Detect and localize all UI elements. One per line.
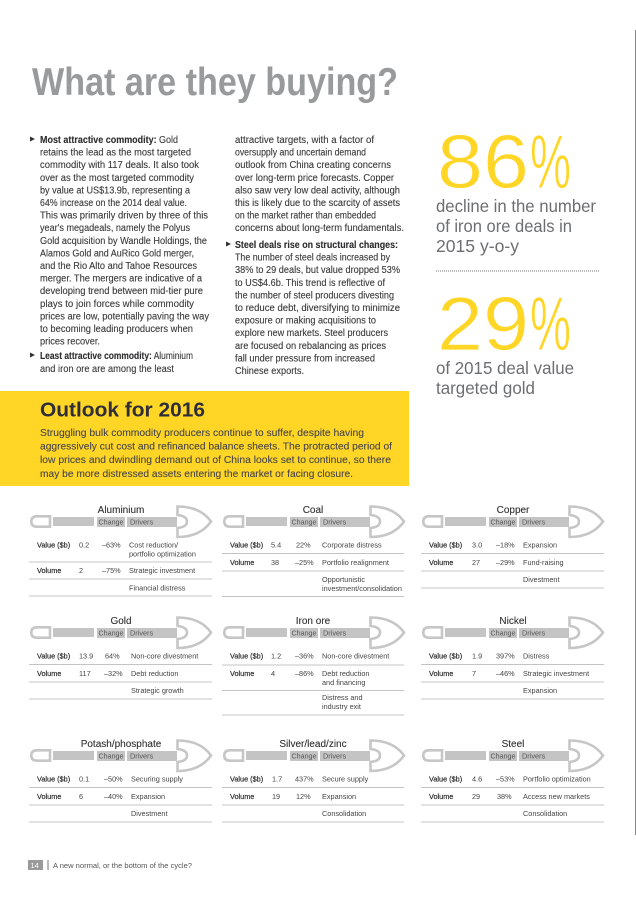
text block: left column: and iron ore are among the least xyxy=(40,364,174,375)
icon: shovel xyxy=(224,618,404,648)
text block: left column: by value at US$13.9b, representing a xyxy=(40,185,190,196)
table: gold data xyxy=(29,652,212,699)
table header xyxy=(98,518,153,526)
table: iron ore data: –86% xyxy=(295,669,314,678)
table: silver data: 437% xyxy=(295,774,314,784)
heading: gold: Gold xyxy=(110,616,132,627)
table: aluminium data: 0.2 xyxy=(79,540,89,550)
text block: left column: to becoming leading producers when xyxy=(40,324,193,335)
panel: copper xyxy=(421,505,604,588)
table: iron ore data: Non-core divestment xyxy=(322,652,389,660)
table: steel data xyxy=(421,774,604,822)
text block: left column: and the Rio Alto and Tahoe Resources xyxy=(40,261,197,272)
table: aluminium data: Strategic investment xyxy=(129,566,195,575)
table: coal data: Portfolio realignment xyxy=(322,558,389,567)
table: potash data xyxy=(29,774,212,822)
text block: left column: prices recover. xyxy=(40,337,100,348)
table header: Change xyxy=(292,752,316,760)
table: steel data: Portfolio optimization xyxy=(523,774,591,784)
footer: A new normal, or the bottom of the cycle? xyxy=(53,861,192,870)
table: nickel data: Value ($b) xyxy=(429,652,462,660)
text block: middle column: the number of steel producers divesting xyxy=(235,290,394,301)
icon: shovel xyxy=(423,740,603,771)
text block: left column: Alamos Gold and AuRico Gold merger, xyxy=(40,248,194,259)
table: steel data: 38% xyxy=(497,792,512,801)
text block: middle column: Steel deals rise on structural changes: xyxy=(235,240,398,251)
table header: Drivers xyxy=(522,752,545,760)
panel: steel xyxy=(421,739,604,822)
icon: shovel xyxy=(423,506,603,537)
table: steel data: Consolidation xyxy=(523,809,567,818)
table: steel data: Volume xyxy=(429,792,453,801)
table header xyxy=(490,628,545,638)
table: coal data: Volume xyxy=(230,558,254,567)
text block: left column: Gold acquisition by Wandle Holdings, the xyxy=(40,236,207,247)
table: aluminium data: portfolio optimization xyxy=(129,550,196,558)
table: iron ore data: Value ($b) xyxy=(230,652,263,660)
icon: shovel xyxy=(31,740,211,771)
table: gold data: Strategic growth xyxy=(131,686,184,695)
table header: Change xyxy=(98,518,124,526)
table: silver data: 19 xyxy=(272,792,280,801)
text block: middle column: explore new markets. Steel producers xyxy=(235,328,388,339)
table: potash data: Divestment xyxy=(131,809,168,818)
table: aluminium data: –75% xyxy=(102,566,121,575)
table header: Drivers xyxy=(323,628,346,638)
callout: 86% iron ore: 2015 y-o-y xyxy=(436,236,519,256)
table: silver data: 12% xyxy=(296,792,311,801)
panel: nickel xyxy=(421,616,604,699)
table: coal data xyxy=(222,540,404,596)
table: iron ore data: industry exit xyxy=(322,702,361,711)
table: steel data: Access new markets xyxy=(523,792,590,801)
panel: silver/lead/zinc xyxy=(222,739,404,822)
callout: 86% iron ore: decline in the number xyxy=(436,196,596,216)
table: iron ore data: 1.2 xyxy=(271,652,281,660)
table: coal data: Value ($b) xyxy=(230,540,263,550)
table: gold data: Debt reduction xyxy=(131,669,178,678)
text block: middle column: to US$4.6b. This trend is reflective of xyxy=(235,278,385,289)
table header xyxy=(292,518,346,526)
icon: bullet two xyxy=(30,352,35,358)
text block: middle column: also saw very low deal activity, although xyxy=(235,185,400,196)
text block: left column: retains the lead as the most targeted xyxy=(40,148,191,159)
table header xyxy=(98,752,153,760)
table: nickel data: Expansion xyxy=(523,686,557,695)
text block: left column: plays to join forces while commodity xyxy=(40,299,194,310)
table: silver data: Secure supply xyxy=(322,774,369,784)
table: nickel data: 7 xyxy=(472,669,476,678)
table header: Change xyxy=(490,518,516,526)
text block: middle column: over long-term price forecasts. Copper xyxy=(235,173,395,184)
table: nickel data: –46% xyxy=(496,669,515,678)
table: steel data: 4.6 xyxy=(472,774,482,784)
table: steel data: Value ($b) xyxy=(429,774,462,784)
icon: shovel xyxy=(31,618,211,648)
table: steel data: 29 xyxy=(472,792,480,801)
icon: shovel xyxy=(224,740,404,771)
table: gold data: –32% xyxy=(104,669,123,678)
table header: Change xyxy=(98,752,124,760)
heading: potash/phosphate: Potash/phosphate xyxy=(81,739,162,750)
heading: iron ore: Iron ore xyxy=(296,616,331,627)
table header xyxy=(292,628,346,638)
table: nickel data: 397% xyxy=(496,652,515,660)
text block: middle column: Chinese exports. xyxy=(235,366,304,377)
table: copper data: 3.0 xyxy=(472,540,482,550)
table: steel data: –53% xyxy=(496,774,515,784)
table: copper data: –18% xyxy=(496,540,515,550)
callout: 29% gold: of 2015 deal value xyxy=(436,358,574,378)
table: gold data: 13.9 xyxy=(79,652,93,660)
table: copper data: Volume xyxy=(429,558,453,567)
table: potash data: Expansion xyxy=(131,792,165,801)
panel: coal xyxy=(222,505,404,596)
table header: Change xyxy=(490,752,516,760)
table header: Drivers xyxy=(130,628,153,638)
outlook text: Struggling bulk commodity producers continue to suffer, despite having xyxy=(40,427,364,439)
panel: outlook for 2016 xyxy=(0,391,409,486)
table: nickel data: 1.9 xyxy=(472,652,482,660)
table: potash data: –40% xyxy=(104,792,123,801)
table: iron ore data: Debt reduction xyxy=(322,669,369,678)
text block: middle column xyxy=(226,135,404,377)
table: gold data: 64% xyxy=(105,652,120,660)
text block: left column: Least attractive commodity: Aluminium xyxy=(40,351,193,362)
table: coal data: investment/consolidation xyxy=(322,584,402,593)
table: nickel data: Distress xyxy=(523,652,550,660)
table: silver data: 1.7 xyxy=(272,774,282,784)
text block: middle column: concerns about long-term fundamentals. xyxy=(235,223,404,234)
table: coal data: 5.4 xyxy=(271,540,281,550)
table header xyxy=(490,518,545,526)
table header xyxy=(490,752,545,760)
heading: coal: Coal xyxy=(303,505,323,516)
table: iron ore data: –36% xyxy=(295,652,314,660)
icon: bullet three xyxy=(226,242,231,246)
text block: left column xyxy=(30,135,209,375)
table header xyxy=(98,628,153,638)
table: gold data: Value ($b) xyxy=(37,652,70,660)
callout: 86% iron ore: of iron ore deals in xyxy=(436,216,572,236)
icon: shovel xyxy=(423,618,603,648)
callout: 86% iron ore: % xyxy=(530,120,571,205)
table: silver data: Expansion xyxy=(322,792,356,801)
heading: silver/lead/zinc: Silver/lead/zinc xyxy=(279,739,347,750)
table: coal data: Opportunistic xyxy=(322,575,365,584)
text block: left column: commodity with 117 deals. It also took xyxy=(40,160,200,171)
callout: 29% gold: targeted gold xyxy=(436,378,535,398)
text block: left column: Most attractive commodity: Gold xyxy=(40,135,178,146)
table: gold data: Volume xyxy=(37,669,61,678)
table: copper data xyxy=(421,540,604,588)
text block: left column: year's megadeals, namely the Polyus xyxy=(40,223,190,234)
table: silver data xyxy=(222,774,404,822)
table: potash data: Securing supply xyxy=(131,774,183,784)
text block: left column: developing trend between mid-tier pure xyxy=(40,286,203,297)
table: aluminium data: Cost reduction/ xyxy=(129,540,179,550)
text block: middle column: 38% to 29 deals, but value dropped 53% xyxy=(235,265,400,276)
heading: aluminium: Aluminium xyxy=(98,505,144,516)
text block: middle column: on the market rather than embedded xyxy=(235,211,376,222)
callout: 86% iron ore: 86 xyxy=(437,120,529,205)
table header: Change xyxy=(490,628,516,638)
table: coal data: –25% xyxy=(295,558,314,567)
table: potash data: Volume xyxy=(37,792,61,801)
callout: 29% gold: % xyxy=(530,282,571,367)
outlook text: may be more distressed assets entering the market or facing closure. xyxy=(40,468,353,480)
panel: gold xyxy=(29,616,212,699)
table: iron ore data xyxy=(222,652,404,715)
text block: left column: merger. The mergers are indicative of a xyxy=(40,274,202,285)
table: coal data: Corporate distress xyxy=(322,540,382,550)
heading: outlook: Outlook for 2016 xyxy=(40,400,205,422)
table: copper data: Divestment xyxy=(523,575,560,584)
table header: Change xyxy=(292,628,316,638)
table: gold data: 117 xyxy=(79,669,91,678)
callout: 86% iron ore xyxy=(436,120,596,256)
table: iron ore data: and financing xyxy=(322,678,365,687)
table header: Change xyxy=(292,518,316,526)
title: What are they buying? xyxy=(32,61,398,104)
table: iron ore data: Volume xyxy=(230,669,254,678)
table: nickel data: Strategic investment xyxy=(523,669,589,678)
table header: Drivers xyxy=(130,518,153,526)
table: copper data: –29% xyxy=(496,558,515,567)
table header: Drivers xyxy=(522,518,545,526)
table header: Drivers xyxy=(323,518,346,526)
table: copper data: Fund-raising xyxy=(523,558,564,567)
text block: left column: 64% increase on the 2014 deal value. xyxy=(40,198,187,209)
table: aluminium data xyxy=(29,540,212,596)
text block: middle column: oversupply and uncertain demand xyxy=(235,148,366,159)
table: iron ore data: 4 xyxy=(271,669,275,678)
outlook text: low prices and dwindling demand out of China looks set to continue, so there xyxy=(40,454,391,466)
table header: Drivers xyxy=(130,752,153,760)
table: silver data: Volume xyxy=(230,792,254,801)
text block: middle column: are focused on rebalancing as prices xyxy=(235,341,386,352)
table: nickel data xyxy=(421,652,604,699)
table: nickel data: Volume xyxy=(429,669,453,678)
outlook text xyxy=(40,427,392,480)
table: aluminium data: –63% xyxy=(102,540,121,550)
text block: middle column: to reduce debt, diversifying to minimize xyxy=(235,303,400,314)
table header: Change xyxy=(98,628,124,638)
table: iron ore data: Distress and xyxy=(322,693,363,702)
table: aluminium data: Financial distress xyxy=(129,584,186,592)
table: coal data: 38 xyxy=(271,558,279,567)
text block: middle column: fall under pressure from increased xyxy=(235,353,375,364)
table: aluminium data: 2 xyxy=(79,566,83,575)
text block: left column: prices are low, potentially paving the way xyxy=(40,311,209,322)
callout: 29% gold: 29 xyxy=(437,282,529,367)
text block: middle column: outlook from China creating concerns xyxy=(235,160,391,171)
text block: middle column: The number of steel deals increased by xyxy=(235,253,390,264)
panel: aluminium xyxy=(29,505,212,596)
heading: copper: Copper xyxy=(497,505,530,516)
table: potash data: Value ($b) xyxy=(37,774,70,784)
icon: shovel xyxy=(31,506,211,537)
table header xyxy=(292,752,346,760)
table: potash data: 6 xyxy=(79,792,83,801)
text block: left column: This was primarily driven by three of this xyxy=(40,211,208,222)
table: copper data: 27 xyxy=(472,558,480,567)
table: silver data: Value ($b) xyxy=(230,774,263,784)
table header: Drivers xyxy=(323,752,346,760)
text block: left column: over as the most targeted commodity xyxy=(40,173,194,184)
table: potash data: 0.1 xyxy=(79,774,89,784)
table: copper data: Value ($b) xyxy=(429,540,462,550)
table: copper data: Expansion xyxy=(523,540,557,550)
icon: shovel xyxy=(224,506,404,537)
footer: 14 xyxy=(30,861,39,870)
icon: bullet one xyxy=(30,136,35,142)
panel: iron ore xyxy=(222,616,404,715)
table: coal data: 22% xyxy=(296,540,311,550)
table header: Drivers xyxy=(522,628,545,638)
table: aluminium data: Value ($b) xyxy=(37,540,70,550)
callout: 29% gold xyxy=(436,282,574,398)
text block: middle column: attractive targets, with a factor of xyxy=(235,135,374,146)
text block: middle column: this is likely due to the scarcity of assets xyxy=(235,198,400,209)
table: gold data: Non-core divestment xyxy=(131,652,198,660)
table: aluminium data: Volume xyxy=(37,566,61,575)
outlook text: aggressively cut cost and refinanced balance sheets. The protracted period of xyxy=(40,441,392,453)
table: potash data: –50% xyxy=(104,774,123,784)
table: silver data: Consolidation xyxy=(322,809,366,818)
panel: potash/phosphate xyxy=(29,739,212,822)
heading: nickel: Nickel xyxy=(499,616,527,627)
text block: middle column: exposure or making acquisitions to xyxy=(235,316,376,327)
heading: steel: Steel xyxy=(502,739,524,750)
